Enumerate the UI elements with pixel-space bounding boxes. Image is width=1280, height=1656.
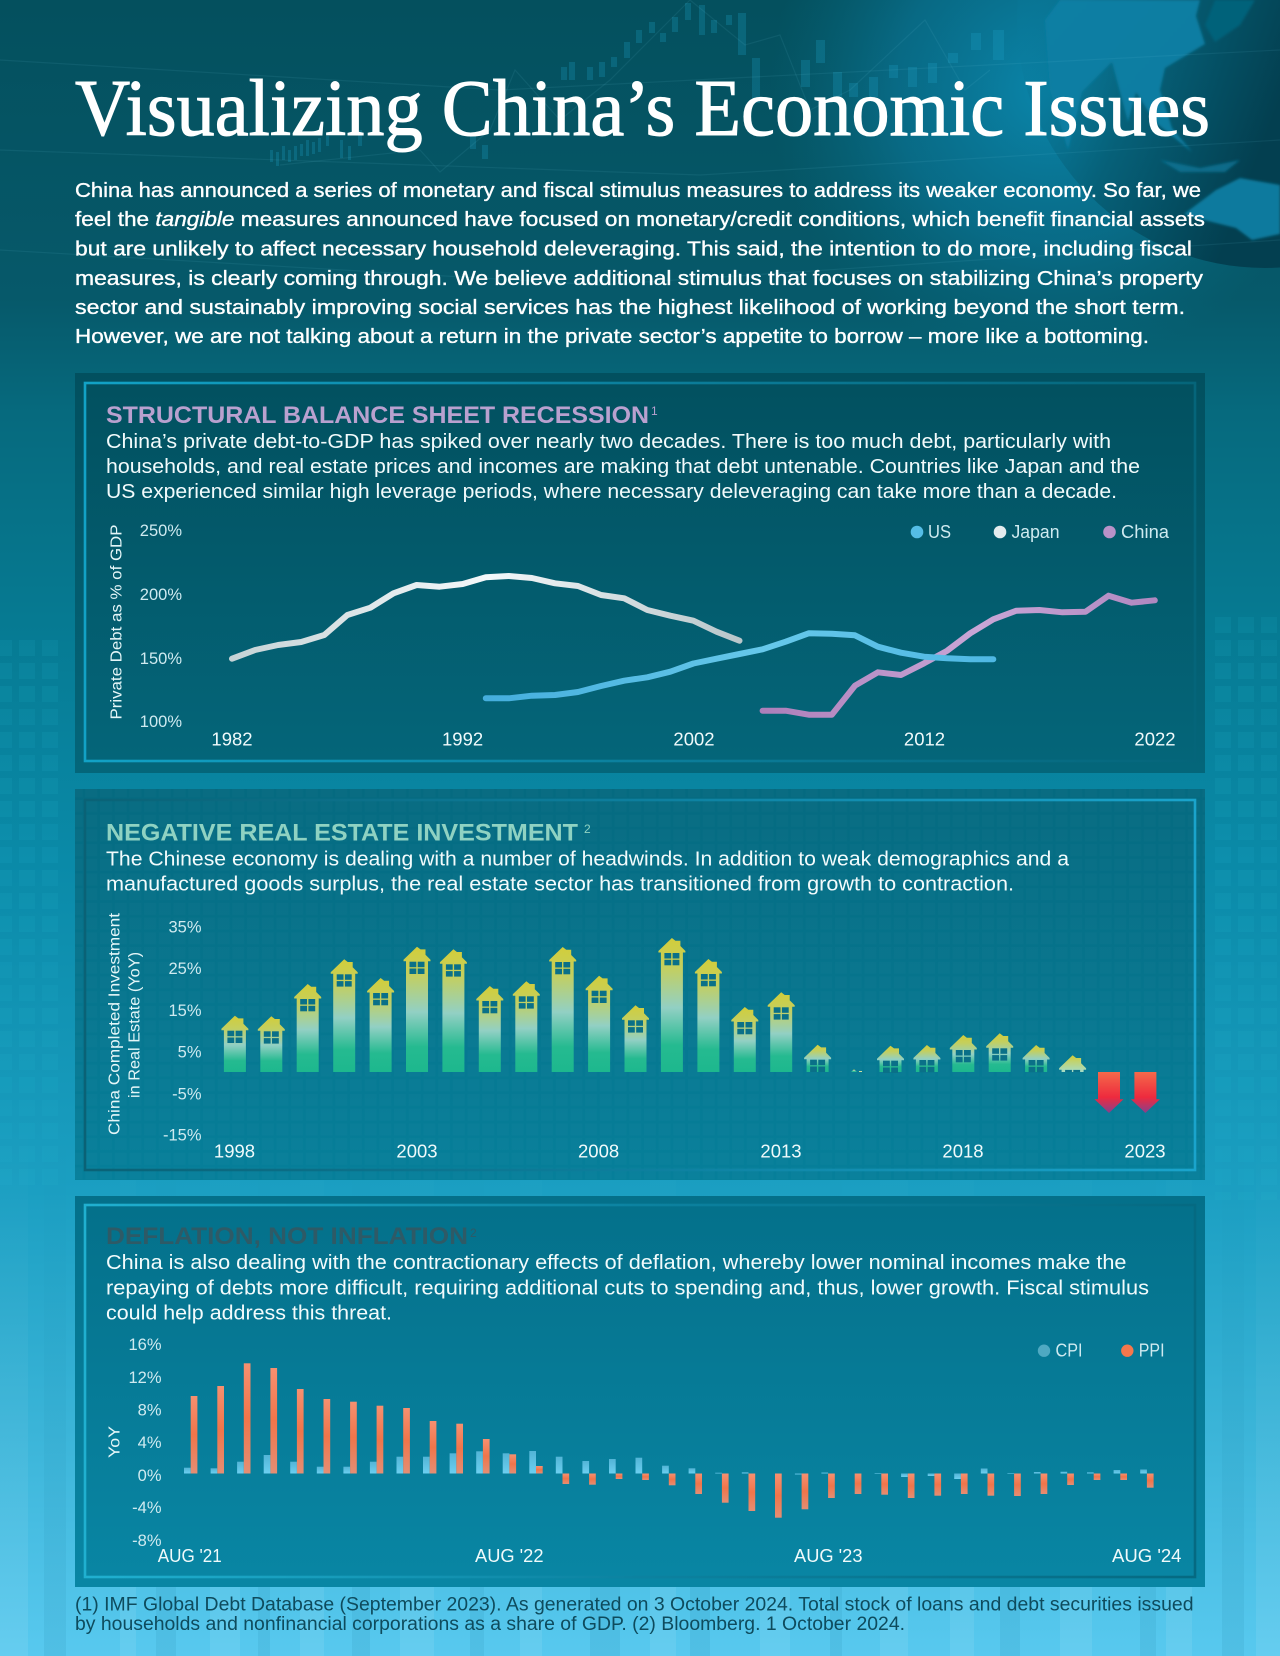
panel 2 body text bbox=[106, 848, 1070, 896]
y axis labels: 4% bbox=[138, 1434, 162, 1452]
faint price lines bbox=[0, 0, 1280, 285]
y axis labels: 200% bbox=[140, 586, 182, 604]
panel 3 body text: repaying of debts more difficult, requiring additional cuts to spending and, thus, lower growth. Fiscal stimulus bbox=[106, 1277, 1149, 1299]
panel: negative real estate investment bbox=[75, 789, 1205, 1180]
grid squares bbox=[0, 610, 1280, 1200]
y axis labels: 100% bbox=[140, 713, 182, 731]
panel 3 body text bbox=[106, 1252, 1149, 1324]
panel 3 body text: China is also dealing with the contractionary effects of deflation, whereby lower nominal incomes make the bbox=[106, 1252, 1126, 1274]
intro paragraph: sector and sustainably improving social services has the highest likelihood of working beyond the short term. bbox=[75, 296, 1185, 319]
legend: PPI bbox=[1139, 1341, 1164, 1361]
y axis labels: 35% bbox=[168, 919, 202, 937]
intro paragraph: China has announced a series of monetary and fiscal stimulus measures to address its weaker economy. So far, we bbox=[75, 179, 1201, 202]
x axis labels: 1982 bbox=[211, 728, 253, 750]
panel: deflation, not inflation bbox=[75, 1196, 1205, 1587]
y axis labels: -8% bbox=[132, 1532, 162, 1550]
x axis labels bbox=[214, 1140, 1166, 1162]
line: US bbox=[486, 633, 993, 698]
y axis labels: 5% bbox=[178, 1044, 202, 1062]
x axis labels: AUG '23 bbox=[794, 1546, 862, 1566]
legend: CPI bbox=[1056, 1341, 1082, 1361]
y axis labels: 15% bbox=[168, 1002, 202, 1020]
x axis labels: 1998 bbox=[214, 1140, 255, 1162]
x axis labels: 2003 bbox=[396, 1140, 438, 1162]
y axis labels: 16% bbox=[128, 1336, 162, 1354]
panel 1 body text bbox=[106, 431, 1140, 503]
y axis labels bbox=[128, 1336, 162, 1550]
y axis labels bbox=[140, 522, 182, 731]
legend: China bbox=[1121, 522, 1170, 542]
x axis labels: AUG '22 bbox=[475, 1546, 544, 1566]
x axis labels bbox=[211, 728, 1176, 750]
footnote: by households and nonfinancial corporations as a share of GDP. (2) Bloomberg. 1 October 2024. bbox=[75, 1614, 905, 1635]
down arrows 2022-2023 bbox=[1094, 1072, 1160, 1113]
heading: structural balance sheet recession: STRUCTURAL BALANCE SHEET RECESSION bbox=[106, 402, 649, 429]
y axis labels: 25% bbox=[168, 960, 202, 978]
intro paragraph: but are unlikely to affect necessary household deleveraging. This said, the intention to do more, including fiscal bbox=[75, 238, 1192, 260]
footnote: (1) IMF Global Debt Database (September 2023). As generated on 3 October 2024. Total stock of loans and debt securities issued bbox=[75, 1594, 1194, 1616]
panel: structural balance sheet recession bbox=[75, 373, 1205, 773]
x axis labels: 1992 bbox=[442, 728, 483, 750]
y axis title bbox=[106, 912, 144, 1135]
footnote bbox=[75, 1594, 1194, 1635]
panel 1 body text: households, and real estate prices and incomes are making that debt untenable. Countries like Japan and the bbox=[106, 456, 1140, 478]
x axis labels: AUG '24 bbox=[1112, 1546, 1182, 1566]
panel 1 body text: US experienced similar high leverage periods, where necessary deleveraging can take more than a decade. bbox=[106, 481, 1117, 503]
heading: structural balance sheet recession: 1 bbox=[651, 404, 658, 418]
intro paragraph bbox=[75, 179, 1205, 348]
y axis labels: -5% bbox=[172, 1085, 202, 1103]
heading: deflation, not inflation: 2 bbox=[470, 1226, 477, 1240]
x axis labels: AUG '21 bbox=[158, 1546, 222, 1566]
lower stripes bbox=[0, 1120, 1280, 1656]
y axis labels bbox=[163, 919, 202, 1145]
panel 1 body text: China’s private debt-to-GDP has spiked over nearly two decades. There is too much debt, particularly with bbox=[106, 431, 1111, 453]
heading: deflation, not inflation: DEFLATION, NOT INFLATION bbox=[106, 1223, 468, 1250]
CPI bars bbox=[184, 1451, 1147, 1479]
y axis labels: 0% bbox=[138, 1467, 162, 1485]
y axis labels: 8% bbox=[138, 1402, 162, 1420]
panel 2 body text: manufactured goods surplus, the real estate sector has transitioned from growth to contraction. bbox=[106, 874, 1014, 896]
title: Visualizing China’s Economic Issues bbox=[75, 65, 1210, 153]
legend: Japan bbox=[1012, 522, 1060, 542]
y axis title: China Completed Investment bbox=[106, 912, 124, 1135]
heading: negative real estate investment: NEGATIVE REAL ESTATE INVESTMENT bbox=[106, 820, 578, 846]
legend bbox=[911, 522, 1170, 542]
candlestick chart backdrop bbox=[270, 3, 1004, 166]
y axis labels: 250% bbox=[140, 522, 182, 540]
line: Japan bbox=[232, 576, 740, 659]
y axis labels: -4% bbox=[132, 1499, 162, 1517]
x axis labels: 2002 bbox=[673, 728, 715, 750]
y axis title: Private Debt as % of GDP bbox=[108, 524, 126, 720]
x axis labels: 2022 bbox=[1134, 728, 1176, 750]
PPI bars bbox=[191, 1363, 1154, 1518]
panel 3 body text: could help address this threat. bbox=[106, 1302, 392, 1324]
x axis labels: 2018 bbox=[942, 1140, 984, 1162]
y axis title: in Real Estate (YoY) bbox=[126, 952, 144, 1098]
y axis labels: 12% bbox=[128, 1369, 162, 1387]
intro paragraph: measures, is clearly coming through. We believe additional stimulus that focuses on stabilizing China’s property bbox=[75, 267, 1204, 290]
x axis labels: 2008 bbox=[578, 1140, 619, 1162]
legend bbox=[1038, 1341, 1164, 1361]
x axis labels: 2012 bbox=[904, 728, 945, 750]
x axis labels: 2013 bbox=[760, 1140, 802, 1162]
intro paragraph: However, we are not talking about a return in the private sector’s appetite to borrow – more like a bottoming. bbox=[75, 325, 1149, 348]
line chart: private debt as % of GDP bbox=[108, 522, 1176, 750]
y axis labels: 150% bbox=[140, 650, 182, 668]
globe bbox=[1017, 0, 1280, 268]
y axis labels: -15% bbox=[163, 1127, 202, 1145]
bar chart: house bars bbox=[106, 912, 1166, 1162]
line: China bbox=[763, 596, 1155, 715]
intro paragraph: feel the tangible measures announced have focused on monetary/credit conditions, which benefit financial assets bbox=[75, 208, 1205, 231]
heading: negative real estate investment: 2 bbox=[584, 822, 591, 836]
y axis title: YoY bbox=[106, 1426, 124, 1458]
house bars 1998-2021 bbox=[221, 938, 1086, 1073]
x axis labels bbox=[158, 1546, 1182, 1566]
x axis labels: 2023 bbox=[1124, 1140, 1166, 1162]
legend: US bbox=[928, 522, 951, 542]
bar chart: CPI and PPI bbox=[106, 1336, 1182, 1566]
panel 2 body text: The Chinese economy is dealing with a number of headwinds. In addition to weak demographics and a bbox=[106, 848, 1070, 870]
